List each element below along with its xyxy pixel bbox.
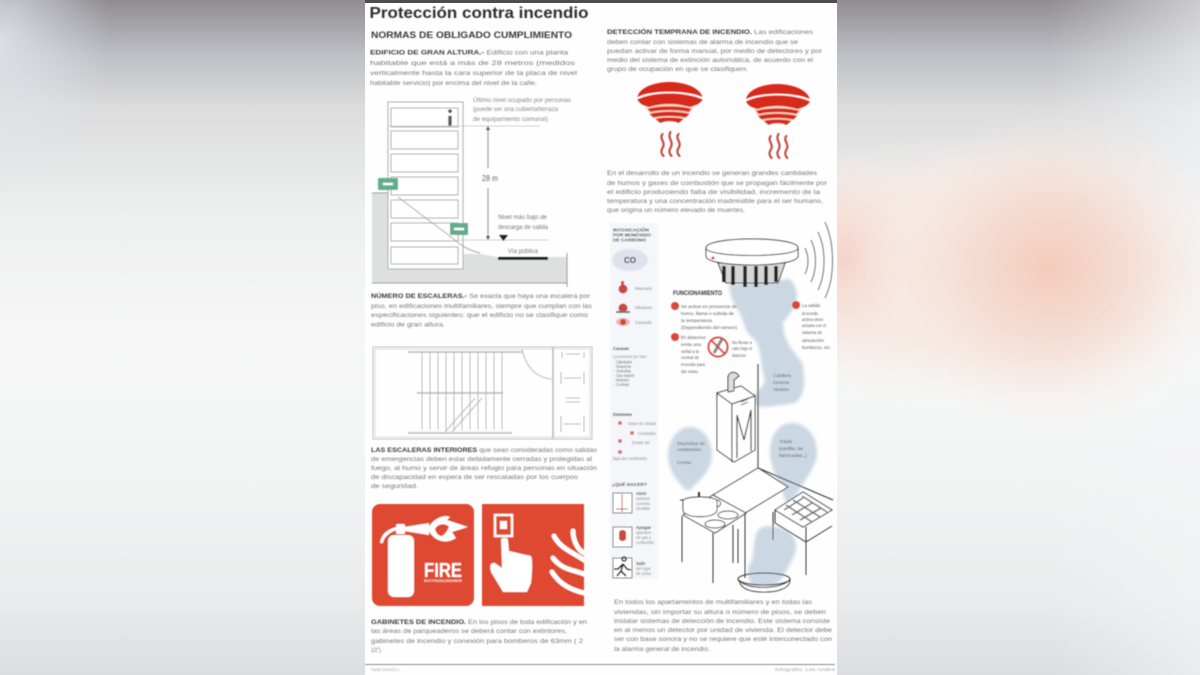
- ground section: [372, 193, 567, 283]
- text block: edificio de gran altura: habitable que está a más de 28 metros (medidos: [370, 61, 575, 67]
- text block: escaleras interiores: fuego, al humo y servir de áreas refugio para personas en situación: [371, 466, 597, 472]
- text block: gabinetes de incendio: [371, 620, 587, 654]
- text block: edificio de gran altura: habitable servicio) por encima del nivel de la calle.: [370, 81, 537, 87]
- step 2: señal a la: [681, 349, 700, 354]
- panel: intoxicación por monóxido de carbono: Gases de cuidado: [628, 421, 656, 426]
- footer: Fuente: norma E.E.A.: [371, 667, 400, 672]
- text block: apartamentos: [614, 600, 833, 653]
- action: abrir: Abrir: [636, 491, 647, 496]
- text block: escaleras interiores: de emergencias deben estar debidamente cerradas y protegidas al: [371, 457, 592, 463]
- diagram labels: Último nivel ocupado por personas: [473, 97, 571, 104]
- text block: detección temprana: deben contar con sistemas de alarma de incendio que se: [607, 40, 799, 46]
- funcionamiento explanation: [671, 290, 831, 465]
- title: Protección contra incendio: [370, 5, 589, 22]
- person: [448, 109, 452, 126]
- symptom icons: [616, 281, 630, 326]
- step 2: emite una: [681, 342, 702, 347]
- panel: intoxicación por monóxido de carbono: La provocan por usar:: [613, 354, 647, 359]
- action: apagar: combustión: [636, 540, 654, 545]
- step 1: la temperatura.: [681, 318, 713, 323]
- no fumar caption: detector: [732, 353, 746, 358]
- text block: edificio de gran altura: verticalmente hasta la cara superior de la placa de nivel: [370, 71, 577, 77]
- action: apagar: [613, 525, 654, 547]
- action: abrir: [613, 491, 651, 513]
- wheelchair spaces: [561, 352, 584, 432]
- step 1: [671, 302, 738, 330]
- icon: fire extinguisher sign: [372, 504, 474, 606]
- emissions list: Emisiones: [613, 412, 632, 418]
- text block: detección temprana: DETECCIÓN TEMPRANA DE INCENDIO. Las edificaciones: [607, 28, 813, 36]
- smoke caption: Caldera: [773, 373, 792, 378]
- panel: intoxicación por monóxido de carbono: Combustión: [638, 431, 656, 436]
- step 3: [792, 301, 831, 350]
- icon: fire alarm call point sign: [482, 504, 584, 606]
- step 2: central de: [681, 355, 700, 360]
- footer: [365, 664, 836, 672]
- what to do heading: ¿QUÉ HACER?: [612, 480, 647, 488]
- icon: red smoke detector right: [746, 84, 810, 158]
- diagram labels: (puede ser una cubierta/terraza: [473, 107, 559, 113]
- action: salir: [613, 557, 652, 578]
- cooking smoke caption: combustión: [677, 447, 702, 452]
- panel: intoxicación por monóxido de carbono: - Gas natural: [614, 373, 634, 378]
- stove smoke caption: (pastillas, las: [779, 446, 804, 451]
- text block: apartamentos: En todos los apartamentos de multifamiliares y en todas las: [614, 600, 812, 606]
- stove smoke caption: [779, 439, 808, 458]
- text block: escaleras interiores: de seguridad.: [371, 484, 418, 490]
- text block: gabinetes de incendio: GABINETES DE INCENDIO. En los pisos de toda edificación y en: [371, 620, 587, 626]
- step 3: sistema de: [802, 330, 823, 335]
- text block: detección temprana: puedan activar de forma manual, por medio de detectores y por: [607, 49, 822, 55]
- panel: intoxicación por monóxido de carbono: Náuseas: [635, 305, 653, 310]
- text block: detección temprana: grupo de ocupación en que se clasifiquen.: [607, 67, 748, 73]
- diagram labels: de equipamiento comunal): [473, 117, 548, 123]
- text block: número de escaleras: NÚMERO DE ESCALERAS.- Se exacta que haya una escalera por: [371, 293, 590, 300]
- step 2: incendio para: [681, 362, 705, 367]
- diagram labels: 28 m: [482, 174, 498, 183]
- step 3: bomberos, etc.: [802, 345, 831, 350]
- stove smoke caption: fabricadas..): [779, 453, 808, 458]
- panel: intoxicación por monóxido de carbono: - Cocinas: [614, 382, 630, 387]
- text block: desarrollo de un incendio: que origina un número elevado de muertes.: [607, 208, 745, 214]
- white page panel: [365, 0, 837, 675]
- action: abrir: y puertas: [636, 501, 651, 506]
- step 2: [671, 333, 707, 374]
- step 3: La salida: [802, 303, 821, 308]
- action: abrir: ventanas: [636, 496, 651, 501]
- diagram labels: descarga de salida: [498, 225, 549, 231]
- text block: número de escaleras: piso, en edificaciones multifamiliares, siempre que cumplan con las: [371, 304, 592, 310]
- road: [498, 257, 548, 260]
- cooking smoke caption: Depósitos de: [677, 441, 706, 446]
- illustration: smoke plumes: [668, 279, 817, 586]
- panel heading: [613, 226, 651, 242]
- text block: gabinetes de incendio: las áreas de parqueaderos se deberá contar con extintores,: [371, 629, 567, 635]
- panel: intoxicación por monóxido de carbono: - Motores: [614, 378, 630, 382]
- text block: número de escaleras: especificaciones siguientes: que el edificio no se clasifique como: [371, 313, 589, 319]
- level marker: [499, 235, 508, 241]
- text block: apartamentos: ser con base sonora y no se requiere que esté interconectado con: [614, 637, 832, 643]
- panel: intoxicación por monóxido de carbono: - Calentador: [614, 360, 632, 364]
- text block: detección temprana: [607, 28, 822, 73]
- panel: intoxicación por monóxido de carbono: Cansado: [635, 320, 653, 325]
- cooking smoke caption: [677, 441, 706, 465]
- green exit signs: [378, 178, 398, 190]
- action: salir: Salir: [636, 561, 646, 566]
- panel: intoxicación por monóxido de carbono: Mareado: [635, 286, 653, 291]
- text block: número de escaleras: [371, 293, 592, 328]
- illustration: boiler: [717, 364, 758, 480]
- text block: desarrollo de un incendio: En el desarrollo de un incendio se generan grandes cantidades: [607, 171, 817, 177]
- sound waves: [805, 222, 832, 298]
- stove: [758, 468, 833, 575]
- step 1: (Dependiendo del sensor): [681, 325, 738, 330]
- action: salir: de prisa: [636, 571, 652, 576]
- text block: número de escaleras: edificio de gran altura.: [371, 322, 445, 328]
- smoke caption: [773, 373, 792, 392]
- text block: apartamentos: viviendas, sin importar su altura o número de pisos, se deben: [614, 610, 826, 616]
- text block: gabinetes de incendio: 1/2").: [371, 648, 382, 654]
- text block: desarrollo de un incendio: el edificio produciendo falta de visibilidad, incremento de la: [607, 190, 821, 196]
- text block: detección temprana: medio del sistema de extinción automática, de acuerdo con el: [607, 58, 813, 64]
- step 3: actuara con el: [802, 323, 826, 328]
- action: abrir: ventilar: [636, 506, 651, 511]
- cooking smoke caption: Cocina: [677, 460, 692, 465]
- panel: intoxicación por monóxido de carbono: CO: [624, 256, 636, 265]
- diagram labels: [473, 97, 571, 255]
- panel heading: DE CARBONO: [613, 238, 646, 242]
- step 1: humo, llama o subida de: [681, 311, 735, 316]
- text block: apartamentos: la alarma general de incendio.: [614, 647, 710, 653]
- footer: Infografía: Los Andes: [775, 667, 836, 672]
- funcionamiento explanation: FUNCIONAMIENTO: [673, 290, 722, 297]
- counter legs: [682, 513, 745, 583]
- step 3: aireación: [802, 338, 825, 343]
- sensor vents: [718, 263, 785, 283]
- pot: [680, 492, 721, 517]
- icon: fire extinguisher sign: EXTINGUISHER: [424, 578, 462, 583]
- icon: fire extinguisher sign: FIRE: [424, 560, 462, 582]
- worktop: [713, 468, 788, 513]
- panel: intoxicación por monóxido de carbono: - Estufas: [614, 368, 632, 374]
- diagram: high-rise building section: [372, 97, 571, 287]
- detector disc: [706, 239, 798, 265]
- building outline and floors: [388, 102, 463, 269]
- action: apagar: Apagar: [636, 525, 651, 530]
- fire bowl: [738, 573, 790, 592]
- step 3: de incendio: [802, 311, 818, 316]
- step 1: Se activa en presencia de: [681, 304, 738, 309]
- text block: edificio de gran altura: EDIFICIO DE GRAN ALTURA.- Edificio con una planta: [370, 50, 569, 56]
- text block: escaleras interiores: [371, 448, 597, 490]
- no fumar caption: [732, 340, 753, 358]
- text block: gabinetes de incendio: gabinetes de incendio y conexión para bomberos de 63mm ( 2: [371, 639, 584, 645]
- diagram: stair plan: [373, 347, 592, 439]
- text block: desarrollo de un incendio: temperatura y una concentración inadmisible para el ser humano,: [607, 199, 823, 205]
- panel: intoxicación por monóxido de carbono: Escape aire: [632, 440, 650, 445]
- action: apagar: aparatos: [636, 530, 652, 535]
- action: apagar: de gas y: [636, 535, 652, 540]
- text block: edificio de gran altura: [370, 50, 577, 87]
- diagram labels: Nivel más bajo de: [498, 215, 548, 221]
- panel heading: INTOXICACIÓN: [613, 226, 650, 232]
- text block: escaleras interiores: LAS ESCALERAS INTERIORES que sean consideradas como salidas: [371, 448, 597, 454]
- icon: no fumar: [708, 338, 728, 356]
- text block: apartamentos: instalar sistemas de detección de incendio. Este sistema consiste: [614, 619, 831, 625]
- panel: intoxicación por monóxido de carbono: [610, 223, 658, 579]
- text block: desarrollo de un incendio: [607, 171, 827, 214]
- cooktop: [683, 495, 746, 533]
- text block: escaleras interiores: de discapacidad en espera de ser rescatadas por los cuerpos: [371, 475, 578, 481]
- causes list: Causas: [613, 346, 629, 352]
- step 2: El detector: [681, 335, 707, 340]
- illustration: kitchen with appliances: [680, 468, 833, 592]
- action: salir: del lugar: [636, 566, 651, 571]
- step 3: activa otros: [802, 317, 824, 322]
- icon: red smoke detector left: [638, 82, 702, 156]
- no fumar caption: cabo bajo el: [732, 346, 752, 351]
- stove smoke caption: Estufa: [780, 439, 793, 444]
- step 2: dar aviso.: [681, 369, 699, 374]
- text block: desarrollo de un incendio: de humos y gases de combustión que se propagan fácilmente por: [607, 181, 827, 187]
- text block: apartamentos: en al menos un detector por unidad de vivienda. El detector debe: [614, 628, 833, 634]
- panel heading: POR MONÓXIDO: [613, 230, 651, 238]
- CO cloud: [612, 249, 648, 271]
- smoke caption: Gorra: [773, 380, 790, 385]
- panel: intoxicación por monóxido de carbono: - Braseros: [614, 364, 632, 369]
- subtitle: NORMAS DE OBLIGADO CUMPLIMIENTO: [371, 30, 572, 41]
- illustration: ceiling smoke detector: [706, 222, 832, 298]
- height dimension: [388, 126, 548, 240]
- smoke caption: Vestido: [773, 387, 790, 392]
- no fumar caption: No llevar a: [732, 340, 753, 345]
- diagram labels: Vía pública: [508, 249, 539, 255]
- panel: intoxicación por monóxido de carbono: Baja aire combustión: [613, 456, 647, 461]
- panel: page content: [365, 5, 836, 672]
